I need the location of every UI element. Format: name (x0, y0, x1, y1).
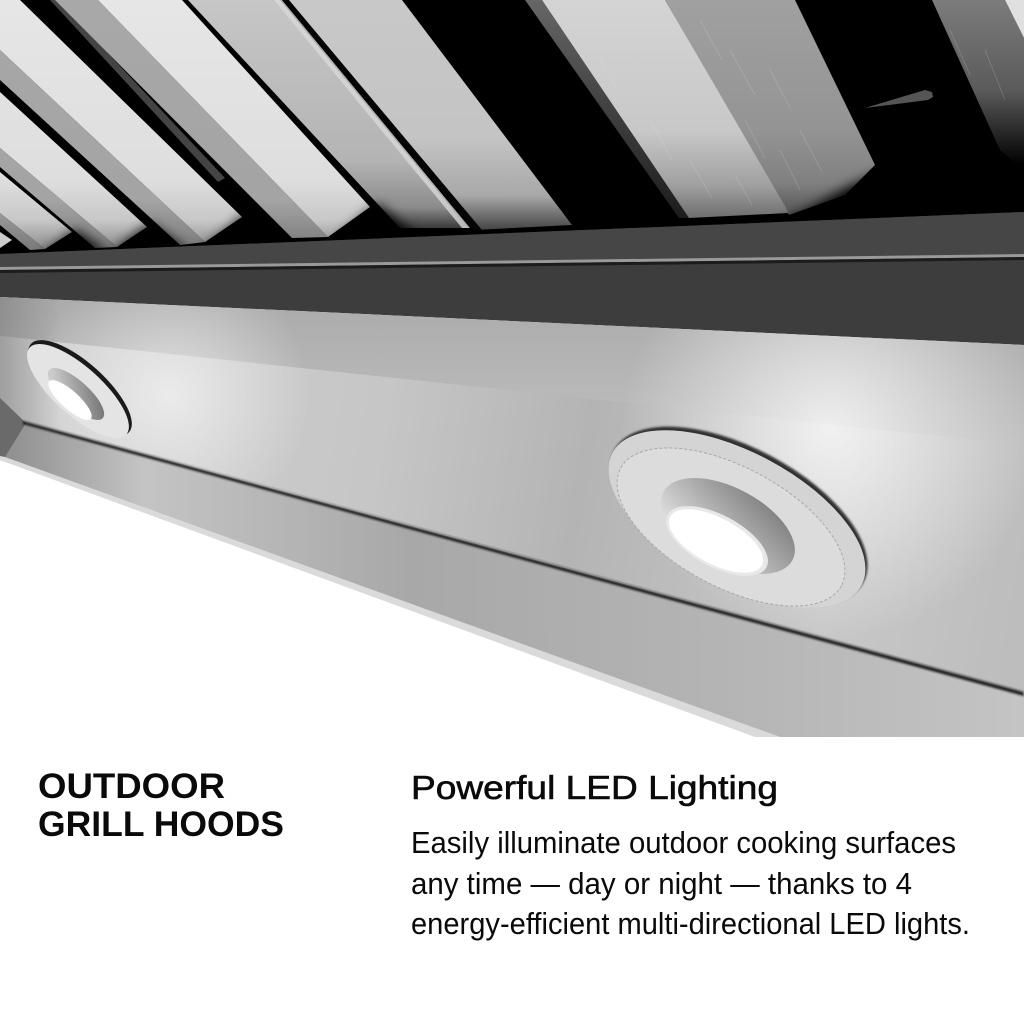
heading: product category: OUTDOOR (38, 767, 225, 806)
silver lower panel (0, 297, 1024, 692)
feature description: any time — day or night — thanks to 4 (411, 866, 912, 901)
heading: product category (38, 767, 284, 844)
dark interior behind baffles (0, 0, 1024, 256)
large LED light, right (581, 390, 895, 644)
lower stainless trim (0, 398, 1024, 737)
baffle pointer tip (865, 90, 933, 108)
hood product photo (0, 0, 1024, 737)
feature description: energy-efficient multi-directional LED lights. (411, 906, 970, 941)
soft shadows across slat ends (40, 172, 910, 256)
baffle slats (0, 0, 1024, 256)
feature description: Easily illuminate outdoor cooking surfaces (411, 825, 956, 860)
brushed steel streaks (600, 20, 1005, 205)
dark trim band (0, 212, 1024, 345)
small LED light, left (14, 325, 146, 452)
feature title: Powerful LED Lighting (411, 769, 778, 806)
feature description (411, 825, 970, 941)
heading: product category: GRILL HOODS (38, 805, 284, 844)
